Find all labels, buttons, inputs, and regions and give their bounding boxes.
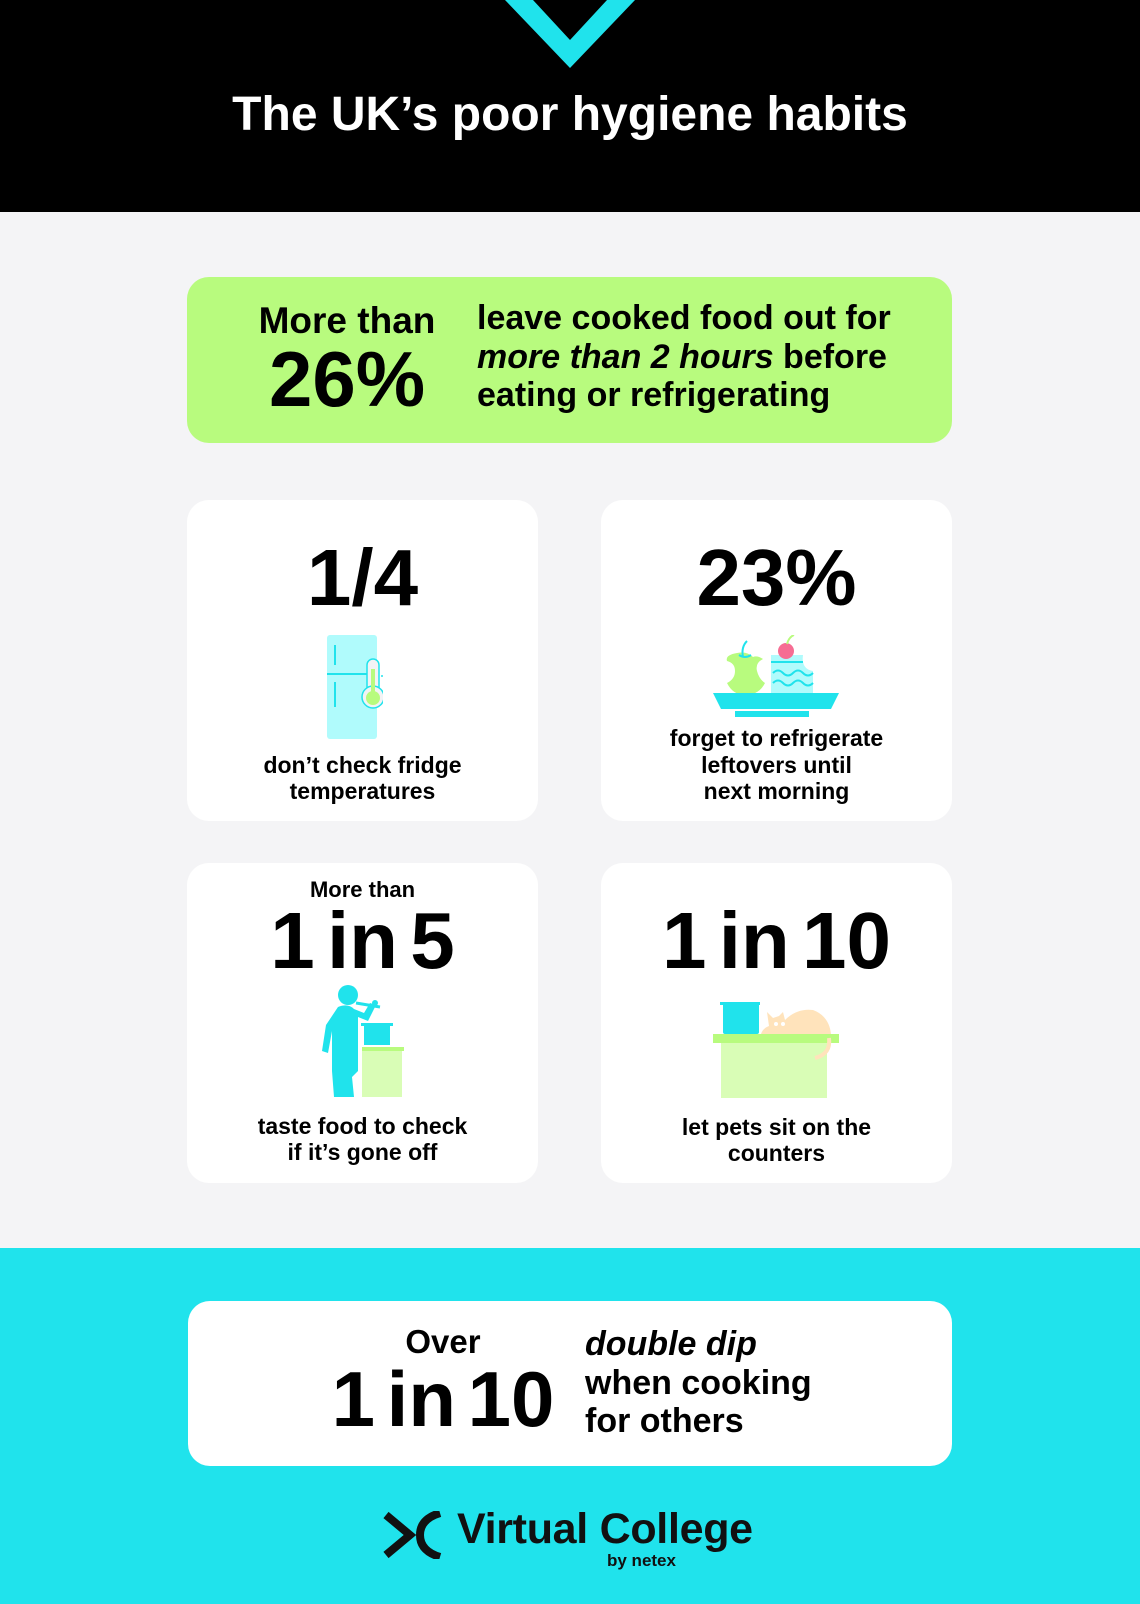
text: next morning xyxy=(704,778,849,804)
icon: person tasting xyxy=(322,985,404,1097)
text xyxy=(584,1325,812,1440)
text: More than 26% xyxy=(259,300,435,423)
text: description: leave cooked food out for xyxy=(477,299,891,337)
footer section xyxy=(0,1248,1140,1604)
panel: 1 in 10 pets xyxy=(601,863,952,1183)
text: temperatures xyxy=(290,778,435,804)
panel: 26% xyxy=(187,277,952,443)
panel: double dip xyxy=(188,1301,952,1466)
title: The UK’s poor hygiene habits xyxy=(232,88,908,141)
header xyxy=(0,0,1140,212)
icon: fridge xyxy=(327,635,383,739)
text: double dip xyxy=(585,1325,757,1363)
panel: 1 in 5 xyxy=(187,863,538,1183)
text: if it’s gone off xyxy=(288,1139,437,1165)
text: when cooking xyxy=(585,1364,812,1402)
text: leftovers until xyxy=(701,752,852,778)
text xyxy=(670,725,883,804)
text: Virtual College: Virtual College xyxy=(457,1505,753,1553)
logo xyxy=(384,1505,753,1570)
stat: 1 in 5 xyxy=(270,896,455,985)
text: description: more than 2 hours before xyxy=(477,338,887,376)
stat: 1 in 10 xyxy=(662,896,891,985)
text: description: eating or refrigerating xyxy=(477,376,830,414)
icon: cat on counter xyxy=(713,1002,839,1098)
stat: Over xyxy=(405,1323,481,1360)
text: taste food to check xyxy=(258,1113,467,1139)
stat: 23% xyxy=(696,533,857,622)
icon: leftovers xyxy=(713,635,839,717)
panel: 1/4 xyxy=(187,500,538,821)
stat: 1 in 10 xyxy=(332,1355,554,1443)
text: let pets sit on the xyxy=(682,1114,871,1140)
text: More than 26%: 26% xyxy=(269,335,425,423)
text: for others xyxy=(585,1402,744,1440)
text: More than 26%: More than xyxy=(259,300,435,341)
icon: logo mark xyxy=(384,1511,442,1559)
text: don’t check fridge xyxy=(263,752,462,778)
text xyxy=(682,1114,871,1166)
text xyxy=(263,752,462,804)
text: by netex: by netex xyxy=(607,1551,676,1570)
panel: 23% xyxy=(601,500,952,821)
icon: chevron xyxy=(505,0,635,68)
stat: 1/4 xyxy=(307,533,418,622)
text: counters xyxy=(728,1140,825,1166)
text: description xyxy=(477,299,891,414)
text: forget to refrigerate xyxy=(670,725,883,751)
stat: More than xyxy=(310,877,415,902)
text xyxy=(258,1113,468,1165)
